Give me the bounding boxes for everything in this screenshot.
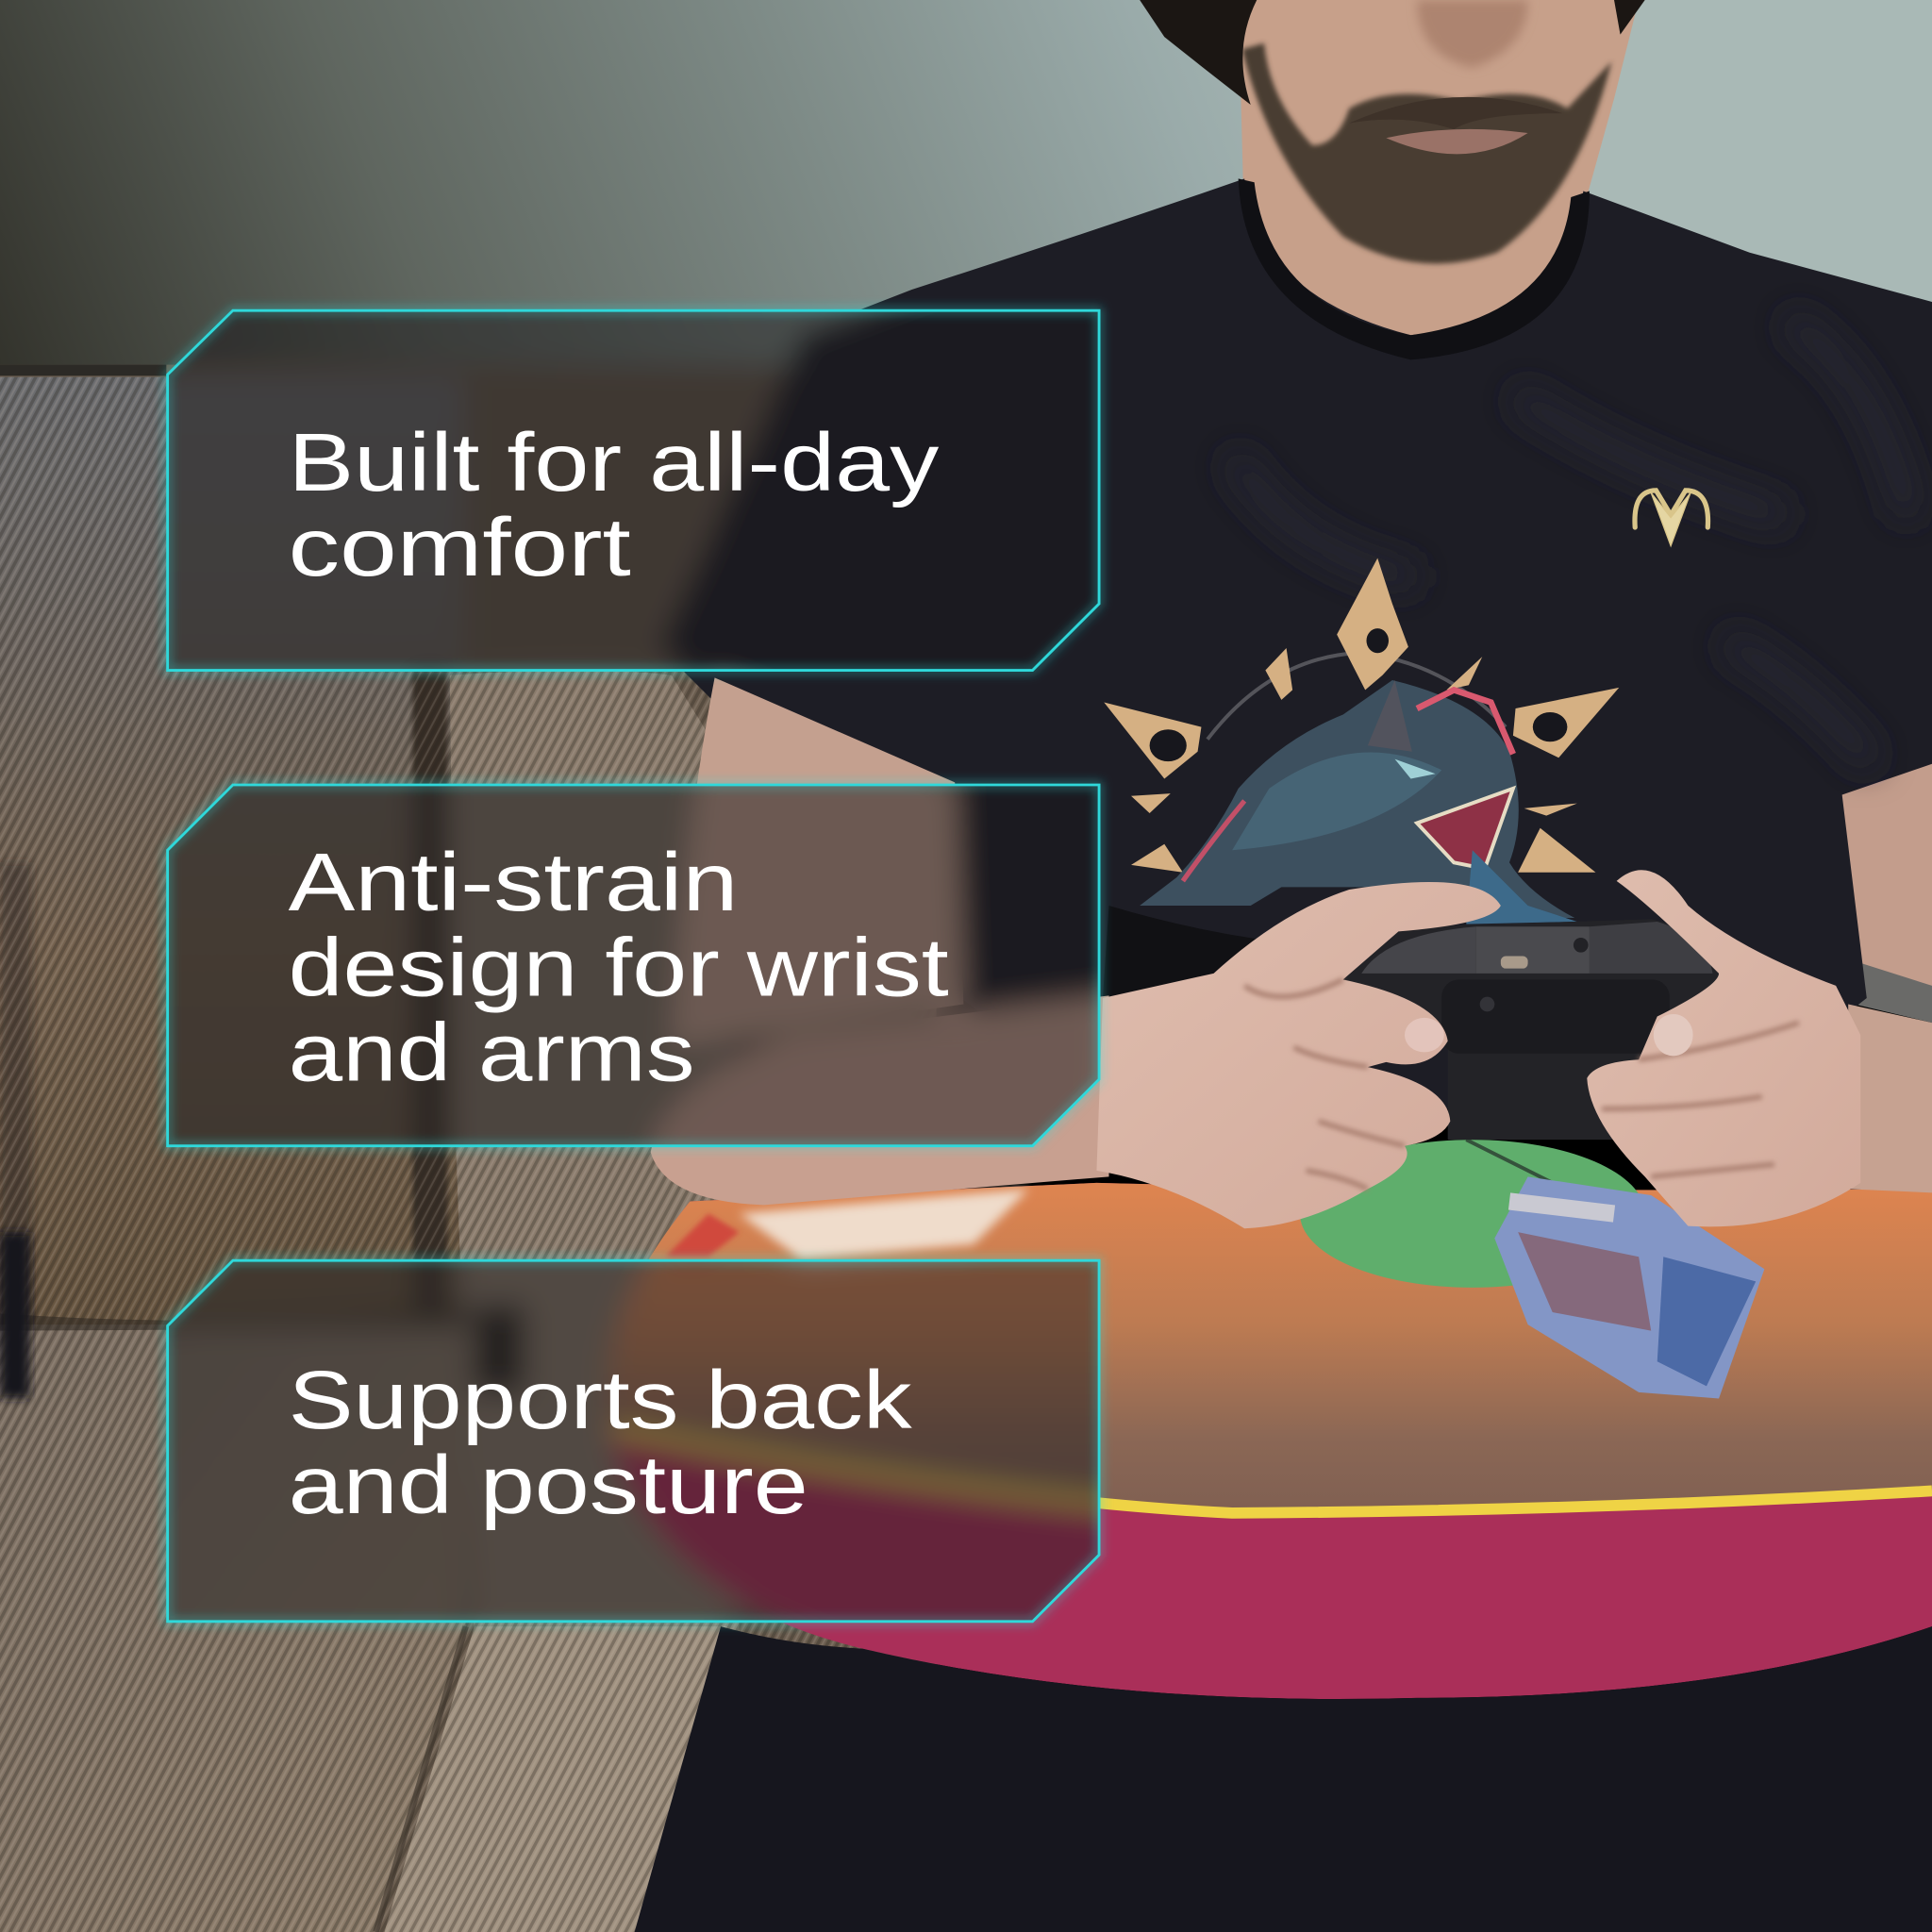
panel text: [289, 1354, 912, 1531]
panel text: Anti-strain: [289, 836, 738, 928]
panel text: [289, 416, 940, 593]
panel: Supports back and posture: [158, 1251, 1109, 1631]
far arm behind sleeve: [1836, 758, 1932, 1023]
wall: [0, 0, 1932, 419]
head and beard: [1140, 0, 1645, 335]
panel text: comfort: [289, 501, 631, 593]
far forearm: [1848, 1004, 1932, 1192]
right hand: [1587, 870, 1860, 1226]
panel: Built for all-day comfort: [158, 301, 1108, 679]
panel text: and posture: [289, 1439, 808, 1531]
panel text: and arms: [289, 1006, 695, 1098]
panel: Anti-strain design: [158, 775, 1109, 1156]
panel text: Supports back: [289, 1354, 912, 1446]
forearm resting on pillow: [651, 995, 1109, 1205]
sofa: [0, 365, 937, 1932]
pillow: [607, 1183, 1932, 1699]
panel text: design for wrist: [289, 921, 949, 1013]
panel text: Built for all-day: [289, 416, 940, 508]
icon: gold chest logo: [1635, 491, 1708, 546]
shirt print: monster with gold spikes: [1104, 558, 1619, 924]
left hand: [1096, 882, 1501, 1228]
pillow print: green shell: [1300, 1140, 1645, 1288]
panel text: [289, 836, 949, 1098]
black t-shirt: [659, 178, 1932, 1109]
shorts: [635, 1626, 1932, 1932]
upper arm: [672, 677, 963, 1047]
pillow print: blue robot: [1494, 1176, 1764, 1398]
controller: [1341, 919, 1723, 1140]
